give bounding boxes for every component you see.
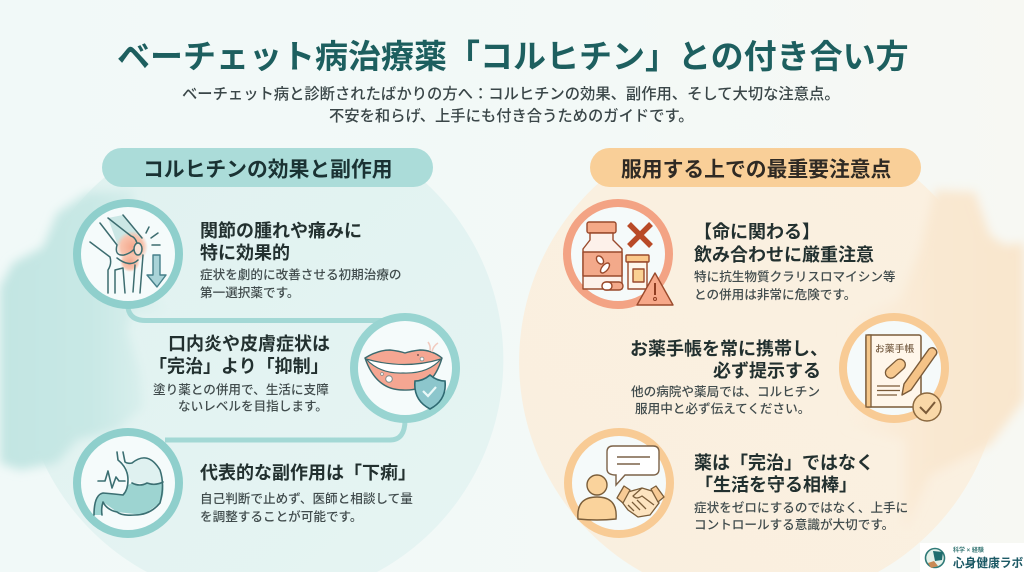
logo: 心身健康ラボ: [920, 543, 1024, 572]
text block: interactions: 【命に関わる】: [694, 222, 820, 242]
icon: knee joint: [77, 203, 179, 305]
text block: partner for life: コントロールする意識が大切です。: [694, 517, 894, 532]
panel: left background circle: [0, 168, 503, 572]
text block: interactions: [694, 222, 896, 302]
text block: mouth and skin: 「完治」より「抑制」: [149, 356, 329, 376]
icon: medicine notebook and pen: お薬手帳: [875, 342, 914, 355]
text block: mouth and skin: [149, 334, 330, 414]
text block: joint effect: [200, 220, 402, 300]
text block: partner for life: 症状をゼロにするのではなく、上手に: [694, 500, 908, 515]
icon: stomach: [77, 432, 179, 534]
subtitle: [182, 86, 840, 125]
text block: mouth and skin: 口内炎や皮膚症状は: [168, 334, 330, 354]
text block: mouth and skin: 塗り薬との併用で、生活に支障: [153, 383, 329, 397]
panel: right background circle: [519, 168, 1024, 572]
text block: joint effect: 症状を劇的に改善させる初期治療の: [200, 267, 402, 282]
text block: interactions: との併用は非常に危険です。: [694, 288, 856, 302]
heading: left section pill: コルヒチンの効果と副作用: [143, 158, 393, 182]
text block: joint effect: 関節の腫れや痛みに: [200, 220, 362, 241]
heading: right section pill: [590, 148, 921, 187]
text block: medicine notebook: 服用中と必ず伝えてください。: [635, 402, 810, 416]
title: ベーチェット病治療薬「コルヒチン」との付き合い方: [117, 38, 909, 75]
text block: partner for life: 「生活を守る相棒」: [695, 475, 857, 495]
logo: 心身健康ラボ: 心身健康ラボ: [953, 556, 1023, 570]
text block: medicine notebook: 他の病院や薬局では、コルヒチン: [631, 385, 820, 399]
icon: medicine notebook and pen: [843, 317, 945, 421]
text block: interactions: 飲み合わせに厳重注意: [694, 244, 874, 265]
logo: 心身健康ラボ: 科学 × 経験: [953, 546, 984, 554]
heading: right section pill: 服用する上での最重要注意点: [621, 158, 892, 182]
icon: lips with shield: [354, 317, 456, 419]
text block: side effect: 自己判断で止めず、医師と相談して量: [200, 491, 413, 506]
text block: mouth and skin: ないレベルを目指します。: [178, 400, 328, 414]
text block: side effect: [200, 463, 416, 524]
connectors: left column: [128, 308, 405, 440]
text block: medicine notebook: お薬手帳を常に携帯し、: [630, 339, 828, 359]
text block: side effect: を調整することが可能です。: [200, 509, 362, 524]
text block: joint effect: 第一選択薬です。: [200, 285, 300, 300]
icon: medicine bottles with warning: [567, 203, 673, 305]
text block: partner for life: 薬は「完治」ではなく: [694, 453, 874, 473]
text block: interactions: 特に抗生物質クラリスロマイシン等: [694, 269, 896, 284]
text block: medicine notebook: [630, 339, 828, 416]
text block: medicine notebook: 必ず提示する: [713, 360, 821, 381]
text block: side effect: 代表的な副作用は「下痢」: [200, 463, 416, 483]
subtitle: 不安を和らげ、上手にも付き合うためのガイドです。: [329, 108, 694, 125]
heading: left section pill: [102, 148, 433, 187]
text block: partner for life: [694, 453, 908, 532]
icon: person and handshake: [568, 432, 670, 534]
subtitle: ベーチェット病と診断されたばかりの方へ：コルヒチンの効果、副作用、そして大切な注意点。: [182, 86, 840, 103]
text block: joint effect: 特に効果的: [200, 243, 290, 263]
